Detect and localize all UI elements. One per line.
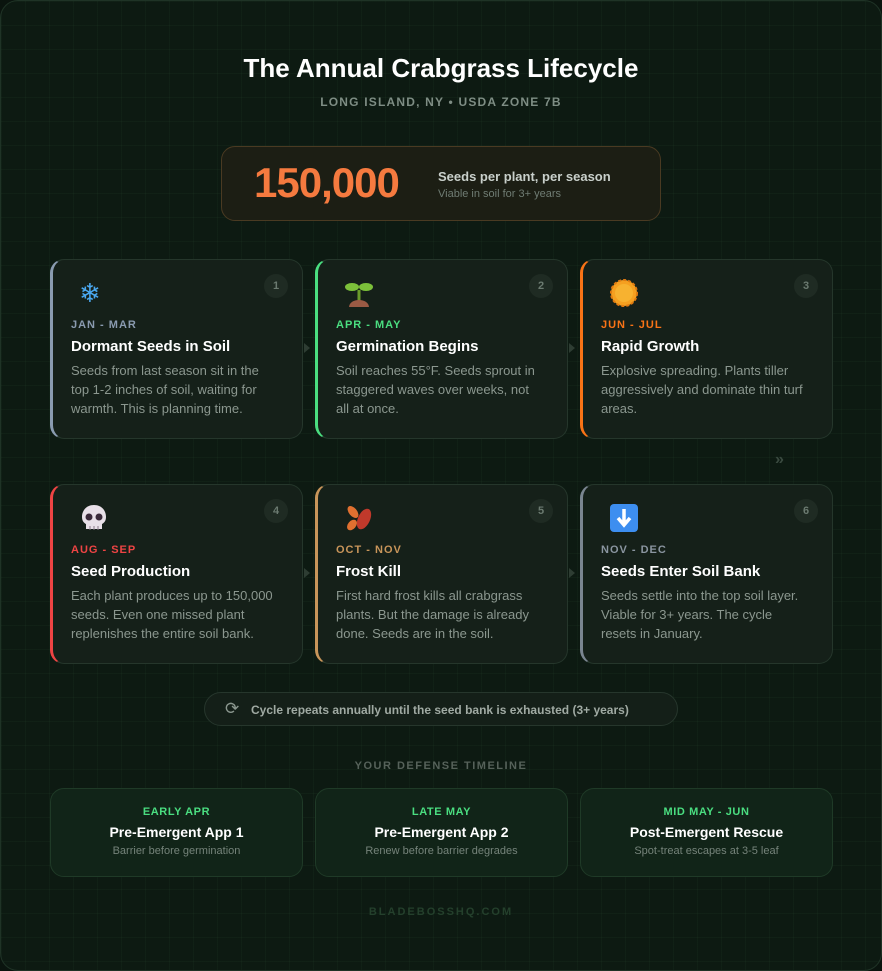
card 1 xyxy=(50,259,303,439)
icon: down arrow xyxy=(610,504,638,532)
card 1: JAN - MAR xyxy=(71,319,137,331)
arrow xyxy=(304,343,310,353)
icon: refresh: ⟳ xyxy=(225,699,239,718)
card 3: 3 xyxy=(803,280,809,292)
defense card 3: Spot-treat escapes at 3-5 leaf xyxy=(634,845,779,857)
icon: snowflake: ❄ xyxy=(79,278,101,308)
arrow xyxy=(569,568,575,578)
card 5: Frost Kill xyxy=(336,563,401,580)
defense card 2: LATE MAY xyxy=(412,806,471,818)
card 5 xyxy=(315,484,568,664)
card 5: 5 xyxy=(538,505,544,517)
card 3: Explosive spreading. Plants tiller aggressively and dominate thin turf areas. xyxy=(601,363,803,416)
card 3: Rapid Growth xyxy=(601,338,699,355)
card 6: Seeds settle into the top soil layer. Viable for 3+ years. The cycle resets in January. xyxy=(601,588,798,641)
defense card 1: EARLY APR xyxy=(143,806,210,818)
stat label: Seeds per plant, per season xyxy=(438,169,611,184)
card 2 xyxy=(315,259,568,439)
card 6: NOV - DEC xyxy=(601,544,667,556)
icon: skull xyxy=(82,505,106,530)
card 6 xyxy=(580,484,833,664)
stat sublabel: Viable in soil for 3+ years xyxy=(438,188,561,200)
card 5: First hard frost kills all crabgrass plants. But the damage is already done. Seeds are in the soil. xyxy=(336,588,529,641)
card 2: Soil reaches 55°F. Seeds sprout in staggered waves over weeks, not all at once. xyxy=(336,363,535,416)
card 4 xyxy=(50,484,303,664)
card 4: Each plant produces up to 150,000 seeds. Even one missed plant replenishes the entire soil bank. xyxy=(71,588,273,641)
big number: 150,000 xyxy=(254,159,399,206)
defense card 1: Pre-Emergent App 1 xyxy=(109,824,244,840)
card 6: Seeds Enter Soil Bank xyxy=(601,563,760,580)
icon: sun xyxy=(610,279,638,307)
card 2: 2 xyxy=(538,280,544,292)
icon: seedling xyxy=(345,283,373,307)
card 4: AUG - SEP xyxy=(71,544,136,556)
defense card 3 xyxy=(580,788,833,877)
footer: BLADEBOSSHQ.COM xyxy=(369,906,513,918)
defense card 2: Renew before barrier degrades xyxy=(365,845,518,857)
card 1: Dormant Seeds in Soil xyxy=(71,338,230,355)
card 1: Seeds from last season sit in the top 1-2 inches of soil, waiting for warmth. This is planning time. xyxy=(71,363,259,416)
card 6: 6 xyxy=(803,505,809,517)
stat callout xyxy=(221,146,661,221)
card 1: 1 xyxy=(273,280,279,292)
title: The Annual Crabgrass Lifecycle xyxy=(244,53,638,83)
defense card 1: Barrier before germination xyxy=(113,845,240,857)
card 2: Germination Begins xyxy=(336,338,479,355)
defense card 3: MID MAY - JUN xyxy=(663,806,750,818)
card 3: JUN - JUL xyxy=(601,319,663,331)
cycle note pill: Cycle repeats annually until the seed bank is exhausted (3+ years) xyxy=(251,703,629,717)
defense card 1 xyxy=(50,788,303,877)
card 3 xyxy=(580,259,833,439)
card 4: Seed Production xyxy=(71,563,190,580)
card 2: APR - MAY xyxy=(336,319,401,331)
arrow xyxy=(569,343,575,353)
arrow xyxy=(304,568,310,578)
defense card 2 xyxy=(315,788,568,877)
arrow: wrap: » xyxy=(775,451,784,468)
section heading: YOUR DEFENSE TIMELINE xyxy=(355,760,527,772)
card 4: 4 xyxy=(273,505,279,517)
defense card 2: Pre-Emergent App 2 xyxy=(374,824,509,840)
card 5: OCT - NOV xyxy=(336,544,402,556)
cycle note pill xyxy=(204,692,678,726)
subtitle: LONG ISLAND, NY • USDA ZONE 7B xyxy=(320,95,562,109)
icon: leaves xyxy=(347,506,372,530)
defense card 3: Post-Emergent Rescue xyxy=(630,824,783,840)
